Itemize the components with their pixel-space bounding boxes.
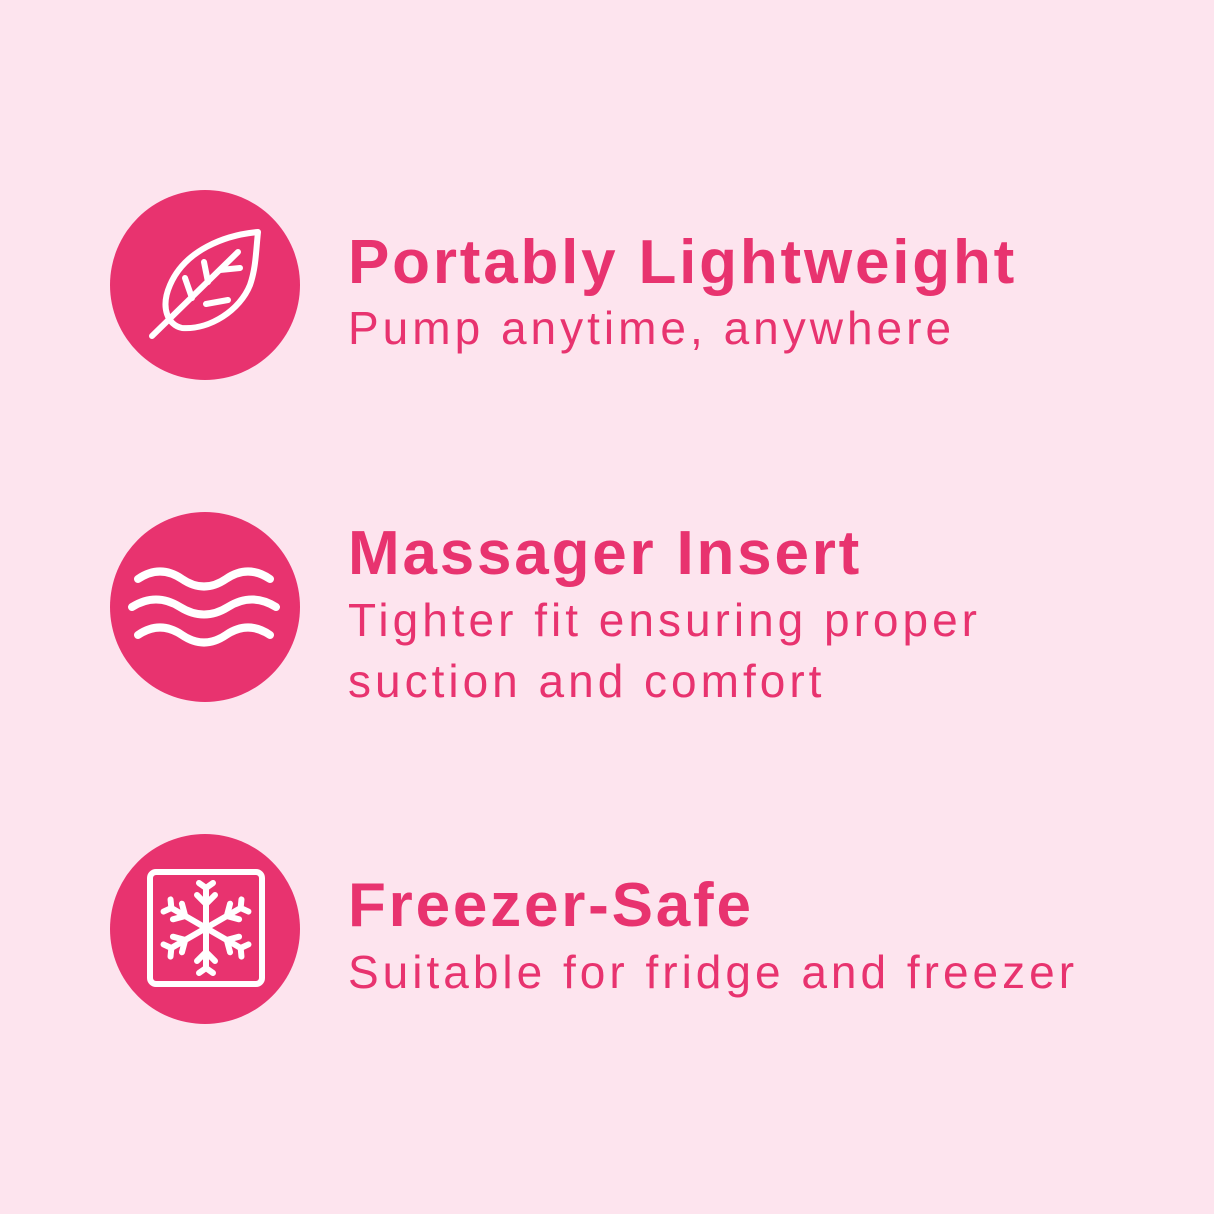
subtitle 3: Suitable for fridge and freezer bbox=[348, 946, 1078, 998]
title: massager insert: Massager Insert bbox=[348, 519, 862, 588]
subtitle 1: Pump anytime, anywhere bbox=[348, 302, 955, 354]
icon: feather bbox=[110, 190, 300, 380]
title: freezer-safe: Freezer-Safe bbox=[348, 871, 754, 940]
icon: freezer snowflake bbox=[110, 834, 300, 1024]
subtitle 2: Tighter fit ensuring proper bbox=[348, 594, 981, 646]
subtitle 2 bbox=[348, 594, 981, 707]
title: portably lightweight: Portably Lightweight bbox=[348, 228, 1017, 297]
icon: waves bbox=[110, 512, 300, 702]
subtitle 2: suction and comfort bbox=[348, 655, 825, 707]
